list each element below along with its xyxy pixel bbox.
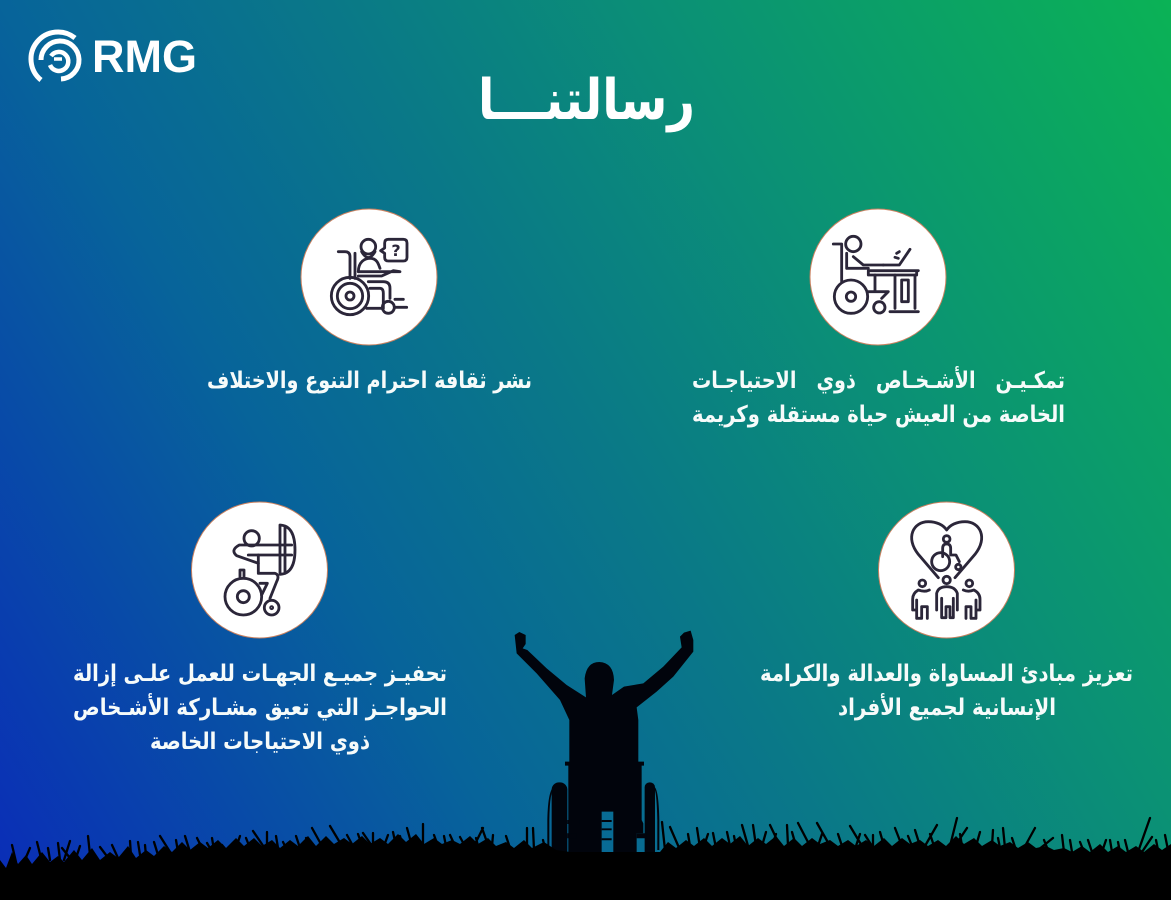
grass: thin blades	[12, 818, 1168, 862]
icon: heart and people	[878, 502, 1014, 638]
text	[73, 661, 447, 755]
panel: equality and dignity	[760, 502, 1133, 721]
text	[760, 661, 1133, 721]
icon: person at desk	[810, 209, 946, 345]
icon: wheelchair archer	[192, 502, 328, 638]
text: تمكـيـن الأشـخـاص ذوي الاحتياجـات	[692, 365, 1065, 394]
grass	[0, 818, 1171, 900]
silhouette: person in wheelchair with raised arms	[515, 631, 693, 862]
text: ذوي الاحتياجات الخاصة	[150, 729, 370, 755]
logo wordmark: RMG	[92, 31, 197, 82]
text: الخاصة من العيش حياة مستقلة وكريمة	[692, 402, 1065, 428]
logo icon: rings	[31, 32, 79, 80]
text: الإنسانية لجميع الأفراد	[838, 692, 1056, 721]
title: رسالتنـــا	[478, 68, 695, 133]
text: نشر ثقافة احترام التنوع والاختلاف	[207, 368, 532, 394]
panel: independent living	[692, 209, 1065, 428]
panel: removing barriers	[73, 502, 447, 755]
text	[692, 365, 1065, 428]
icon glyph: question mark: ?	[391, 241, 401, 260]
text: الحواجـز التي تعيق مشـاركة الأشـخاص	[73, 692, 447, 721]
icon: wheelchair user with question	[301, 209, 437, 345]
text: تحفيـز جميـع الجهـات للعمل علـى إزالة	[73, 661, 447, 687]
grass: ground and low tuft band	[0, 834, 1171, 900]
panel: culture of diversity	[207, 209, 532, 394]
logo: RMG	[31, 31, 197, 82]
